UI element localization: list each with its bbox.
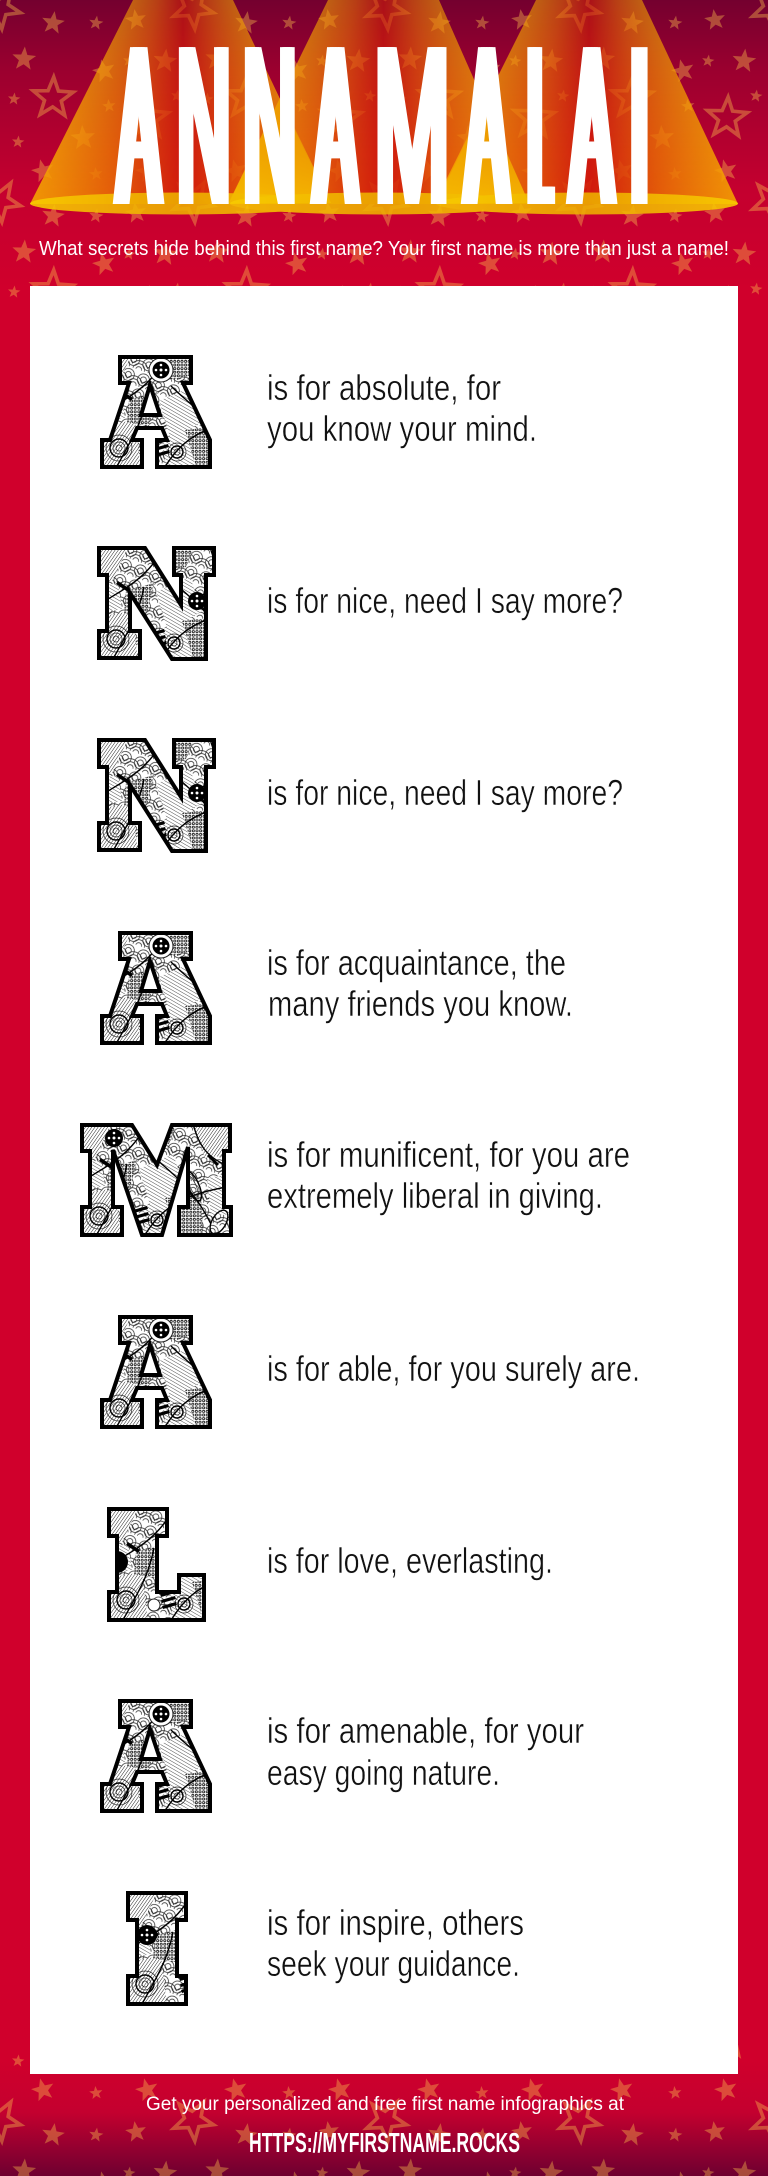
spotlight cone left (30, 0, 302, 204)
text: N meaning: is for nice, need I say more? (267, 580, 623, 621)
row: letter A second (102, 933, 573, 1043)
icon: doodle letter N (99, 548, 214, 659)
spotlight overlap glow left (229, 98, 331, 203)
row: letter N second (99, 740, 623, 851)
footer call to action: Get your personalized and free first name infographics at (146, 2094, 625, 2115)
title: A (571, 0, 613, 253)
row: letter I (128, 1893, 524, 2004)
text: A meaning: many friends you know. (268, 983, 573, 1024)
title: N (177, 0, 230, 253)
text: I meaning (267, 1902, 524, 1984)
text: A meaning (267, 942, 573, 1024)
row: letter L (109, 1509, 553, 1620)
footer url: HTTPS://MYFIRSTNAME.ROCKS (249, 2127, 520, 2158)
row: letter A (102, 357, 537, 467)
title: L (530, 0, 551, 253)
subtitle: What secrets hide behind this first name? Your first name is more than just a name! (39, 238, 729, 260)
title: A (315, 0, 357, 253)
text: A meaning: is for able, for you surely are. (267, 1348, 640, 1389)
icon: doodle letter L (109, 1509, 204, 1620)
icon: doodle letter N (99, 740, 214, 851)
title: M (374, 0, 450, 253)
title: I (615, 0, 664, 253)
text: M meaning (267, 1134, 630, 1216)
title: N (243, 0, 296, 253)
text: A meaning: you know your mind. (267, 408, 537, 449)
text: M meaning: extremely liberal in giving. (267, 1175, 603, 1216)
icon: doodle letter M (82, 1125, 231, 1235)
icon: doodle letter A (102, 933, 210, 1043)
spotlight cone middle (229, 0, 489, 204)
row: letter A fourth (102, 1701, 584, 1811)
icon: doodle letter A (102, 357, 210, 467)
spotlight cone right (446, 0, 738, 204)
spotlight floor ellipses (30, 192, 738, 214)
row: letter M (82, 1125, 630, 1235)
text: A meaning: is for amenable, for your (267, 1710, 584, 1751)
white content panel (30, 286, 738, 2074)
row: letter N (99, 548, 623, 659)
text: I meaning: seek your guidance. (267, 1943, 520, 1984)
text: A meaning: is for absolute, for (267, 367, 501, 408)
text: A meaning: easy going nature. (267, 1752, 500, 1793)
title: A (466, 0, 508, 253)
row: letter A third (102, 1317, 640, 1427)
text: A meaning (267, 1710, 584, 1793)
title: A (118, 0, 160, 253)
title (112, 0, 664, 253)
text: M meaning: is for munificent, for you are (267, 1134, 630, 1175)
text: L meaning: is for love, everlasting. (267, 1540, 553, 1581)
spotlight overlap glow right (436, 104, 529, 203)
text: I meaning: is for inspire, others (267, 1902, 524, 1943)
text: N meaning: is for nice, need I say more? (267, 772, 623, 813)
icon: doodle letter A (102, 1317, 210, 1427)
text: A meaning: is for acquaintance, the (267, 942, 566, 983)
icon: doodle letter A (102, 1701, 210, 1811)
text: A meaning (267, 367, 537, 449)
icon: doodle letter I (128, 1893, 186, 2004)
